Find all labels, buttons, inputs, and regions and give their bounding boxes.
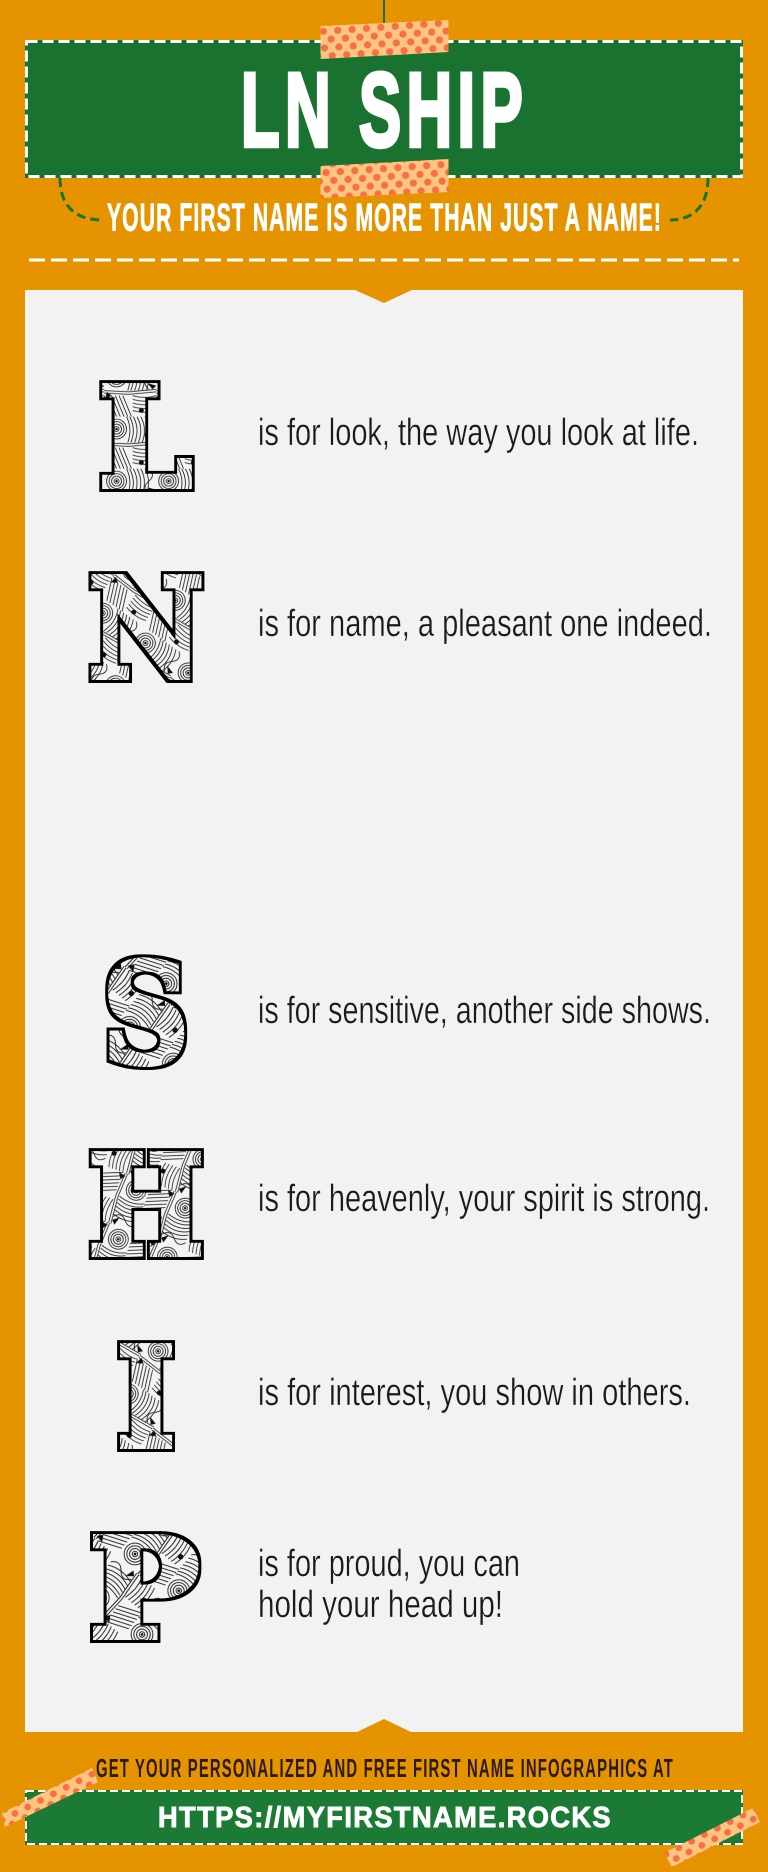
panel: letters: [25, 290, 743, 1732]
letter H row: [89, 1126, 710, 1287]
text: P: [258, 1543, 520, 1626]
tape: banner top: [320, 20, 448, 59]
title banner: [25, 40, 743, 178]
letter H: H: [89, 1126, 204, 1287]
letter N: N: [89, 549, 204, 710]
tape: footer left: [2, 1768, 98, 1827]
letter P: P: [89, 1509, 199, 1670]
footer url: HTTPS://MYFIRSTNAME.ROCKS: [158, 1802, 612, 1834]
letter P row: [89, 1509, 520, 1670]
letter S: S: [103, 934, 189, 1095]
letter S row: [103, 934, 711, 1095]
tape: banner bottom: [320, 159, 448, 198]
hanging thread: [383, 0, 385, 24]
letter I row: [117, 1318, 691, 1479]
tape: footer right: [664, 1808, 760, 1867]
text: P: is for proud, you can: [258, 1543, 520, 1585]
letter L row: [99, 358, 699, 519]
text: P: hold your head up!: [258, 1584, 503, 1626]
dashed connector right: [670, 178, 708, 220]
letter L: L: [99, 358, 192, 519]
dashed connector left: [60, 178, 103, 220]
footer banner: [25, 1790, 743, 1845]
letter N row: [89, 549, 712, 710]
dashed divider: [29, 258, 739, 262]
title: LN SHIP: [241, 52, 528, 169]
letter I: I: [117, 1318, 175, 1479]
